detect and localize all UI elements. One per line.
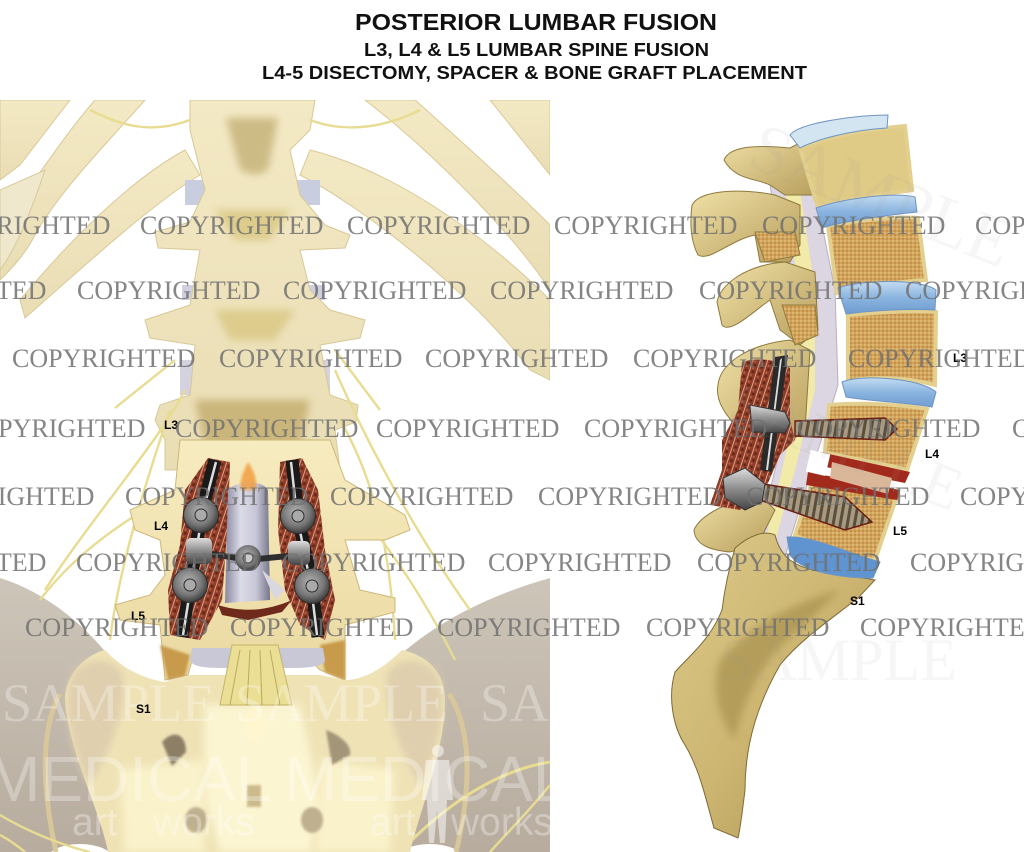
- copyright watermark rows: COPYRIGHTED: [797, 414, 980, 443]
- copyright watermark rows: COPYRIGHTED: [554, 211, 737, 240]
- level labels, lateral view: L5: [893, 524, 907, 538]
- copyright watermark rows: COPYRIGHTED: [76, 548, 259, 577]
- L4 body: [825, 404, 927, 470]
- level labels, posterior view: L3: [164, 418, 178, 432]
- copyright watermark rows: COPYRIGHTED: [230, 613, 413, 642]
- watermark: sample, lateral view: SAMPLE: [739, 108, 1024, 283]
- background pelvis shading: [0, 578, 550, 852]
- rod: right: [292, 460, 318, 637]
- copyright watermark rows: COPYRIGHTED: [25, 613, 208, 642]
- copyright watermark rows: COPYRIGHTED: [437, 613, 620, 642]
- cross link: [186, 538, 310, 571]
- cauda equina and lower disc: [190, 645, 325, 705]
- title block: [262, 9, 807, 83]
- level labels, posterior view: [131, 418, 178, 716]
- L1 body: [800, 126, 912, 208]
- subheading: spine levels: L3, L4 & L5 LUMBAR SPINE FUSION: [364, 40, 709, 60]
- cord stripe: [762, 190, 815, 560]
- level labels, posterior view: S1: [136, 702, 151, 716]
- watermark: sample medical art works: art: [72, 801, 118, 844]
- copyright watermark rows: [0, 211, 1024, 642]
- copyright watermark rows: COPYRIGHTED: [283, 276, 466, 305]
- copyright watermark rows: COPYRIGHTED: [646, 613, 829, 642]
- copyright watermark rows: COPYRIGHTED: [699, 276, 882, 305]
- level labels, posterior view: L4: [154, 519, 168, 533]
- disc space with interbody spacer: [806, 450, 910, 500]
- copyright watermark rows: COPYRIGHTED: [762, 211, 945, 240]
- subheading: procedure: L4-5 DISECTOMY, SPACER & BONE GRAFT PLACEMENT: [262, 63, 807, 83]
- iliac vessels behind pelvis: [45, 694, 467, 852]
- dura sac: [218, 462, 292, 620]
- copyright watermark rows: COPYRIGHTED: [490, 276, 673, 305]
- level labels, lateral view: [850, 351, 967, 608]
- copyright watermark rows: COPYRIGHTED: [633, 344, 816, 373]
- upper ribs and transverse processes: [0, 100, 550, 380]
- level labels, lateral view: S1: [850, 594, 865, 608]
- copyright watermark rows: COPYRIGHTED: [330, 482, 513, 511]
- spinal canal: [750, 185, 838, 590]
- panel: lateral view of lumbar spine: [672, 108, 1024, 838]
- pedicle screw: L5: [723, 468, 872, 530]
- panel: posterior view of lumbar spine: [0, 100, 550, 852]
- vertebral bodies: [795, 126, 936, 560]
- copyright watermark rows: COPYRIGHTED: [538, 482, 721, 511]
- copyright watermark rows: COPYRIGHTED: [125, 482, 308, 511]
- level labels, lateral view: L4: [925, 447, 939, 461]
- intervertebral discs: [787, 115, 936, 578]
- watermark: sample medical art works: MEDICAL: [284, 743, 568, 815]
- copyright watermark rows: COPYRIGHTED: [175, 414, 358, 443]
- posterior elements: [691, 135, 820, 552]
- upper vertebral column: [145, 100, 365, 470]
- nerve roots: [0, 110, 550, 852]
- L5 body: [795, 482, 897, 560]
- watermark: sample, lateral view: SAMPLE: [720, 627, 957, 693]
- copyright watermark rows: COPYRIGHTED: [488, 548, 671, 577]
- bone graft strips: [168, 458, 335, 640]
- L2 body: [828, 217, 926, 293]
- copyright watermark rows: COPYRIGHTED: [347, 211, 530, 240]
- level labels, posterior view: L5: [131, 609, 145, 623]
- copyright watermark rows: COPYRIGHTED: [77, 276, 260, 305]
- sacrum and iliac wings: [65, 650, 445, 852]
- watermark: sample medical art works: SAMPLE: [480, 673, 693, 733]
- copyright watermark rows: COPYRIGHTED: [697, 548, 880, 577]
- copyright watermark rows: COPYRIGHTED: [584, 414, 767, 443]
- copyright watermark rows: COPYRIGHTED: [282, 548, 465, 577]
- heading: posterior lumbar fusion: POSTERIOR LUMBAR FUSION: [355, 9, 717, 35]
- posterior bone graft: [710, 360, 795, 510]
- rod: left: [182, 460, 215, 637]
- L4 and L5 vertebrae: [115, 440, 410, 680]
- copyright watermark rows: COPYRIGHTED: [746, 482, 929, 511]
- watermark: sample, lateral view: [720, 108, 1024, 693]
- watermark: sample medical art works: [0, 685, 550, 843]
- watermark: sample medical art works: works: [152, 801, 255, 844]
- copyright watermark rows: COPYRIGHTED: [219, 344, 402, 373]
- copyright watermark rows: COPYRIGHTED: [425, 344, 608, 373]
- watermark: sample, lateral view: SAMPLE: [720, 370, 972, 525]
- sacrum, lateral view: [672, 533, 875, 838]
- level labels, lateral view: L3: [953, 351, 967, 365]
- watermark: sample medical art works: SAMPLE: [2, 673, 215, 733]
- L3 body: [848, 311, 936, 385]
- watermark: sample medical art works: works: [450, 801, 553, 844]
- pedicle rods and screws: [172, 460, 330, 637]
- copyright watermark rows: COPYRIGHTED: [140, 211, 323, 240]
- vertebra foramen cutaways: [755, 232, 818, 345]
- watermark: sample medical art works: art: [370, 801, 416, 844]
- screw heads: [172, 498, 330, 604]
- sacrum highlight: [716, 590, 840, 740]
- disc shadows: [185, 180, 320, 205]
- pedicle screw: L4: [750, 355, 897, 472]
- watermark: sample medical art works: SAMPLE: [235, 673, 448, 733]
- copyright watermark rows: COPYRIGHTED: [12, 344, 195, 373]
- copyright watermark rows: COPYRIGHTED: [376, 414, 559, 443]
